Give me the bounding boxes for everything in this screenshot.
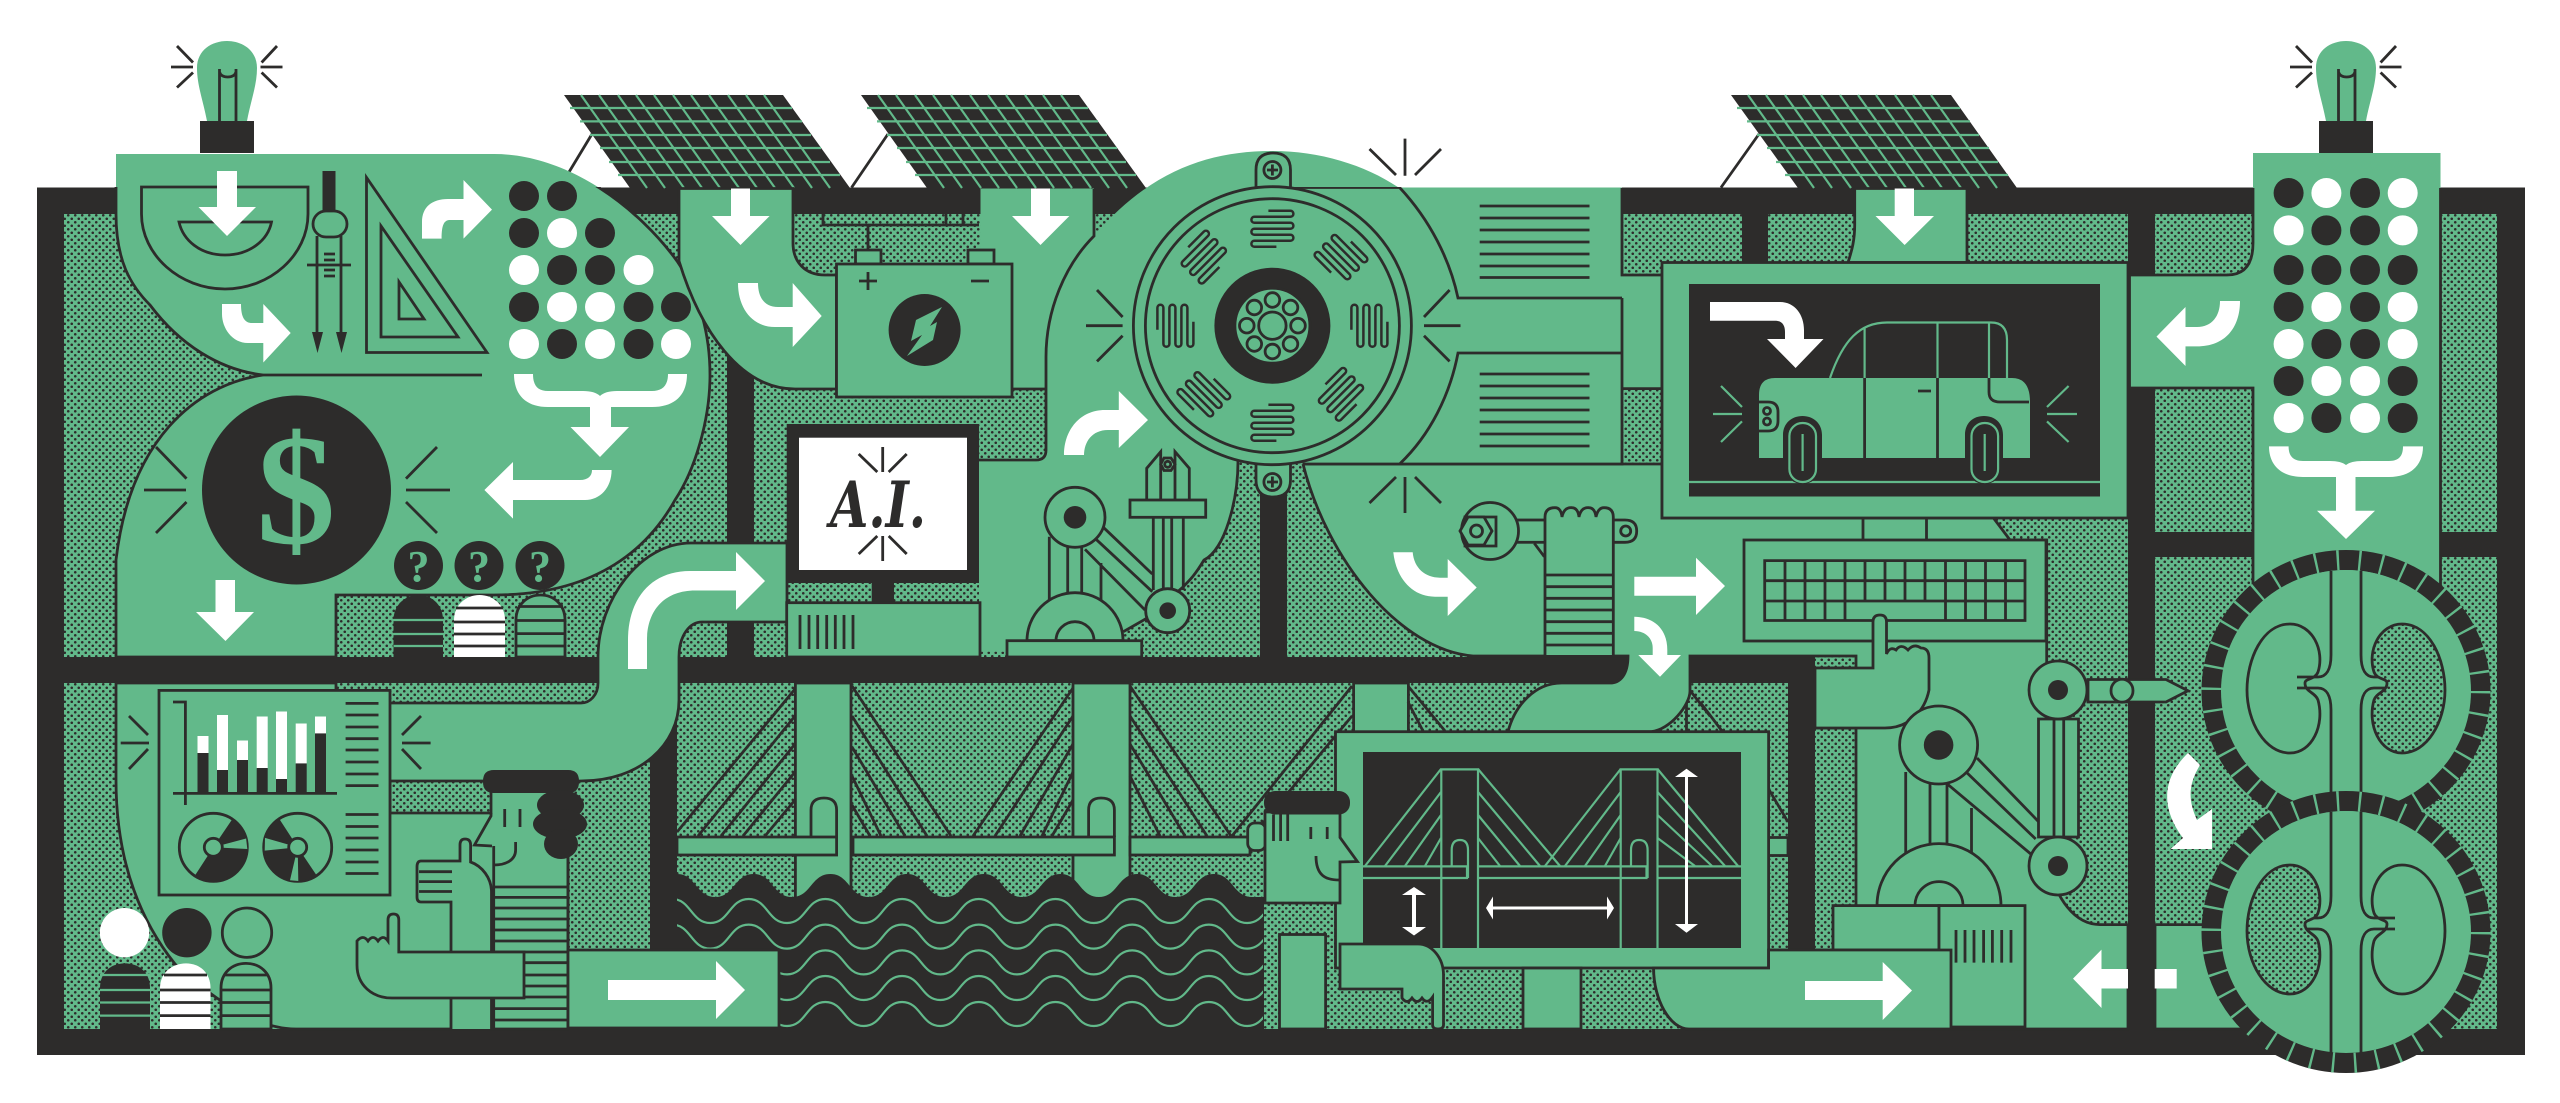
icon: car [1689, 322, 2100, 484]
pipe: right column [2130, 153, 2440, 800]
arrow: curve to compass [222, 304, 291, 362]
rays around report [121, 716, 431, 769]
arrow: span width [1486, 896, 1614, 920]
robot arm right [1877, 661, 2188, 906]
arrow: to dollar [484, 462, 612, 519]
bulb left [171, 41, 282, 153]
arrow: curve into battery [738, 283, 822, 347]
icon: kidney dotted [2372, 624, 2445, 753]
tool tip [2088, 680, 2188, 702]
bridge monitor [1336, 732, 1769, 968]
bar chart [198, 712, 326, 793]
arrow: curve to wrench [1393, 552, 1477, 616]
icon: battery [823, 214, 1012, 397]
arrow: down to motor [1012, 188, 1069, 245]
arrow: curved between gears [2167, 753, 2212, 849]
pipe: wrench, keyboard and robot region [1302, 464, 2128, 1029]
arrow box: to water [568, 950, 779, 1028]
icon: question people: ? [468, 542, 490, 591]
bridge decks [677, 798, 1788, 856]
arrow: big curve to A.I. [628, 552, 765, 669]
arrow: down to bridge [1634, 617, 1681, 677]
solar panel 1 [564, 95, 850, 188]
gear upper with kidneys [2212, 560, 2480, 822]
water waves [672, 899, 1286, 1026]
pipe: top left design and money blob [116, 154, 710, 657]
disc chart right [264, 813, 332, 881]
disc chart left [179, 813, 247, 881]
arrow box: right [1654, 950, 1951, 1029]
short wall [1742, 214, 1768, 262]
icon: kidney plain [2247, 624, 2320, 753]
dark wall behind motor bolt [1260, 480, 1287, 660]
motor bolts [1256, 153, 1290, 497]
motor [1133, 153, 1411, 497]
dot matrix left [509, 181, 691, 359]
pointing hand on keyboard [1815, 615, 1929, 728]
arrow: brace merging dots [514, 374, 687, 457]
arrow: down to battery [712, 188, 770, 245]
arrow: curve to dots [422, 180, 492, 239]
keyboard [1744, 540, 2046, 641]
text lines upper [1480, 206, 1590, 278]
arrow: right to keyboard [1634, 558, 1725, 615]
solar panel 2 [861, 95, 1146, 188]
arrow: left through wall [2073, 950, 2177, 1008]
motor bearing [1214, 268, 1330, 384]
pipe: car feed [1848, 188, 1967, 262]
icon: question people: ? [529, 542, 551, 591]
arrow: left to car monitor [2156, 301, 2240, 366]
dot matrix right [2274, 178, 2418, 433]
water [677, 874, 1264, 1029]
wrench and fist [1460, 502, 1637, 655]
icon: bridge blueprint [1363, 769, 1741, 948]
gear lower with kidneys [2212, 801, 2480, 1063]
arrow: tall height [1675, 769, 1698, 933]
icon: kidney plain [2372, 865, 2445, 994]
arrow: down into bowl [198, 171, 256, 236]
car monitor [1662, 262, 2128, 518]
divider line [263, 374, 482, 376]
icon: drawing compass [307, 171, 351, 353]
building frame [37, 188, 2525, 1055]
text lines lower [1480, 374, 1590, 446]
monitor neck [1863, 518, 1926, 540]
rays around motor [1086, 139, 1460, 513]
icon: dollar coin [144, 396, 450, 584]
icon: protractor bowl [142, 187, 308, 289]
motor coils [1157, 211, 1387, 441]
robot arm left [1007, 452, 1206, 657]
arrow: down to car monitor [1876, 188, 1934, 245]
panel: thumbs up person [357, 770, 587, 1029]
pipe: motor housing [979, 151, 1662, 652]
person with bridge [1248, 791, 1581, 1029]
solar panel 3 [1731, 95, 2017, 188]
machine boxes [1833, 906, 2025, 1027]
icon: dollar coin: $ [256, 403, 336, 578]
report board [159, 690, 390, 895]
panel supports [560, 134, 1759, 188]
icon: question people: ? [408, 542, 430, 591]
icon: question people [394, 541, 565, 657]
icon: set square [366, 178, 487, 352]
arrow: down to reports [196, 580, 254, 641]
people group bottom left [100, 908, 272, 1029]
pipe: lower right bay [2155, 925, 2300, 1029]
pipe: battery feed [679, 188, 836, 389]
arrow: small height [1402, 887, 1426, 936]
A.I. monitor [787, 424, 980, 657]
icon: kidney dotted [2247, 865, 2320, 994]
bridge cables [677, 686, 1788, 836]
bridge towers [795, 683, 1408, 903]
bulb right [2290, 41, 2402, 153]
dotted rooms [64, 214, 2497, 1029]
pipe: lower left reports and A.I. feed [116, 543, 787, 1029]
arrow: brace right column [2269, 446, 2423, 539]
A.I. monitor: A.I. [826, 468, 926, 543]
dark wall mid beside bridge monitor [1788, 683, 1815, 951]
arrow: into motor [1064, 391, 1148, 455]
